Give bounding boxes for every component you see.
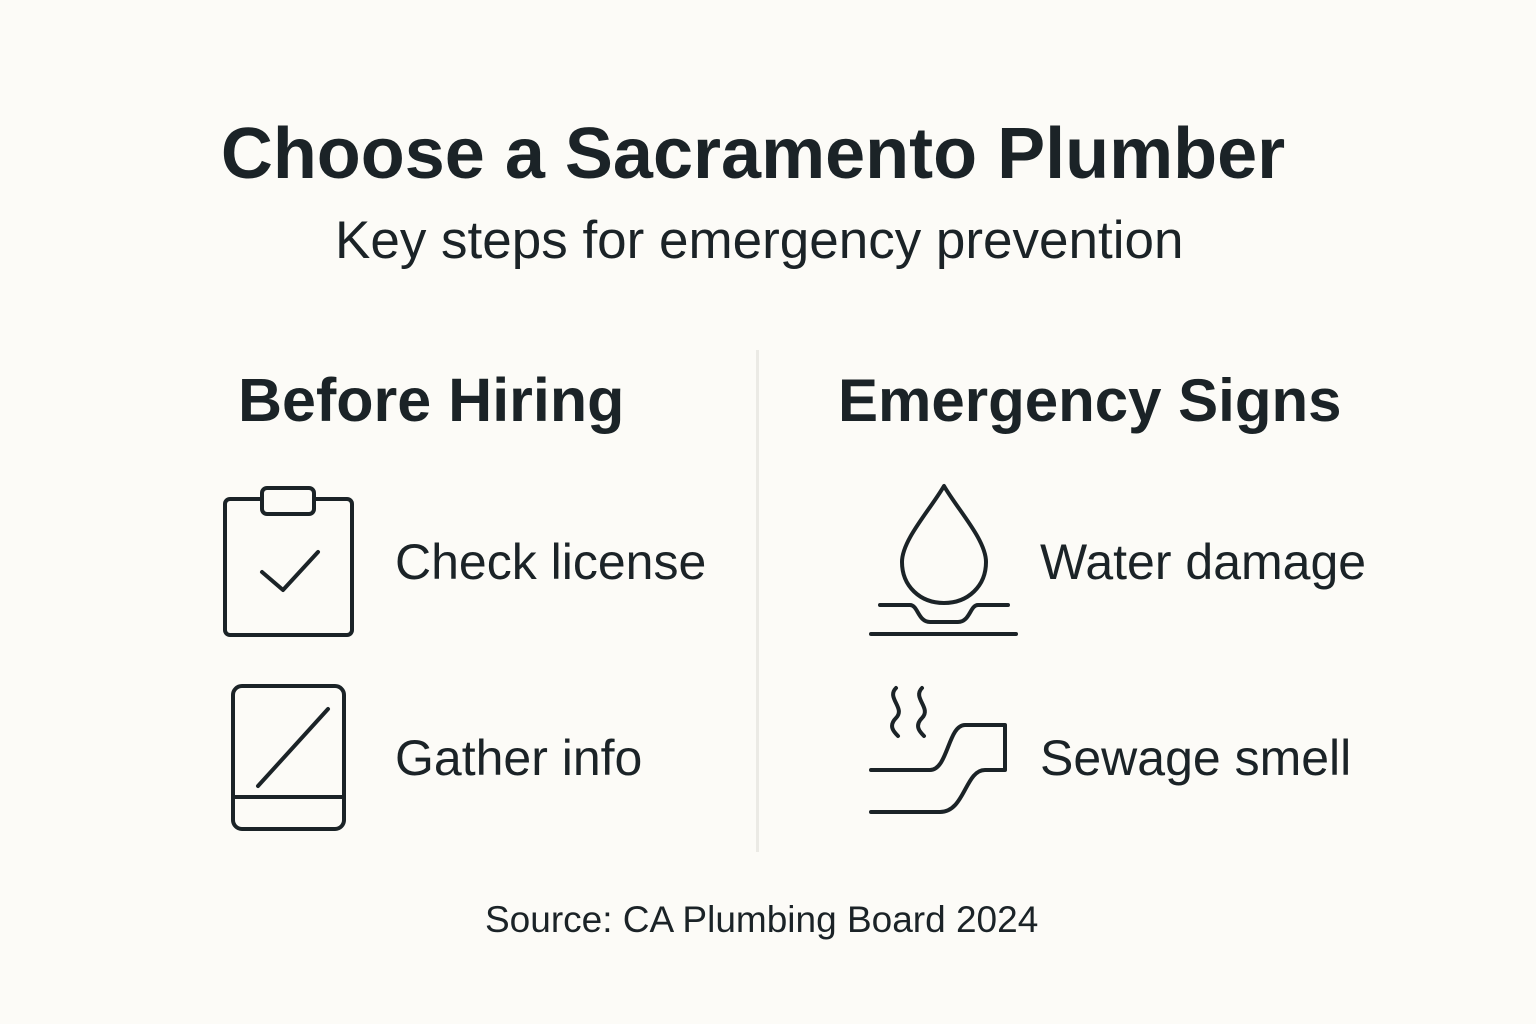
text: sewage smell: Sewage smell	[1040, 730, 1351, 786]
text: gather info: Gather info	[395, 730, 642, 786]
icon: clipboard check	[225, 488, 352, 635]
icon: water drop	[871, 486, 1016, 634]
source: Source: CA Plumbing Board 2024	[485, 899, 1038, 940]
title: Choose a Sacramento Plumber	[221, 114, 1285, 194]
divider	[756, 350, 759, 852]
heading: emergency signs: Emergency Signs	[838, 367, 1342, 434]
heading: before hiring: Before Hiring	[238, 366, 624, 434]
icon: tablet	[233, 686, 344, 829]
text: water damage: Water damage	[1040, 534, 1366, 590]
text: check license: Check license	[395, 534, 706, 590]
subtitle: Key steps for emergency prevention	[335, 211, 1183, 270]
icon: sewage pipe	[871, 688, 1005, 812]
